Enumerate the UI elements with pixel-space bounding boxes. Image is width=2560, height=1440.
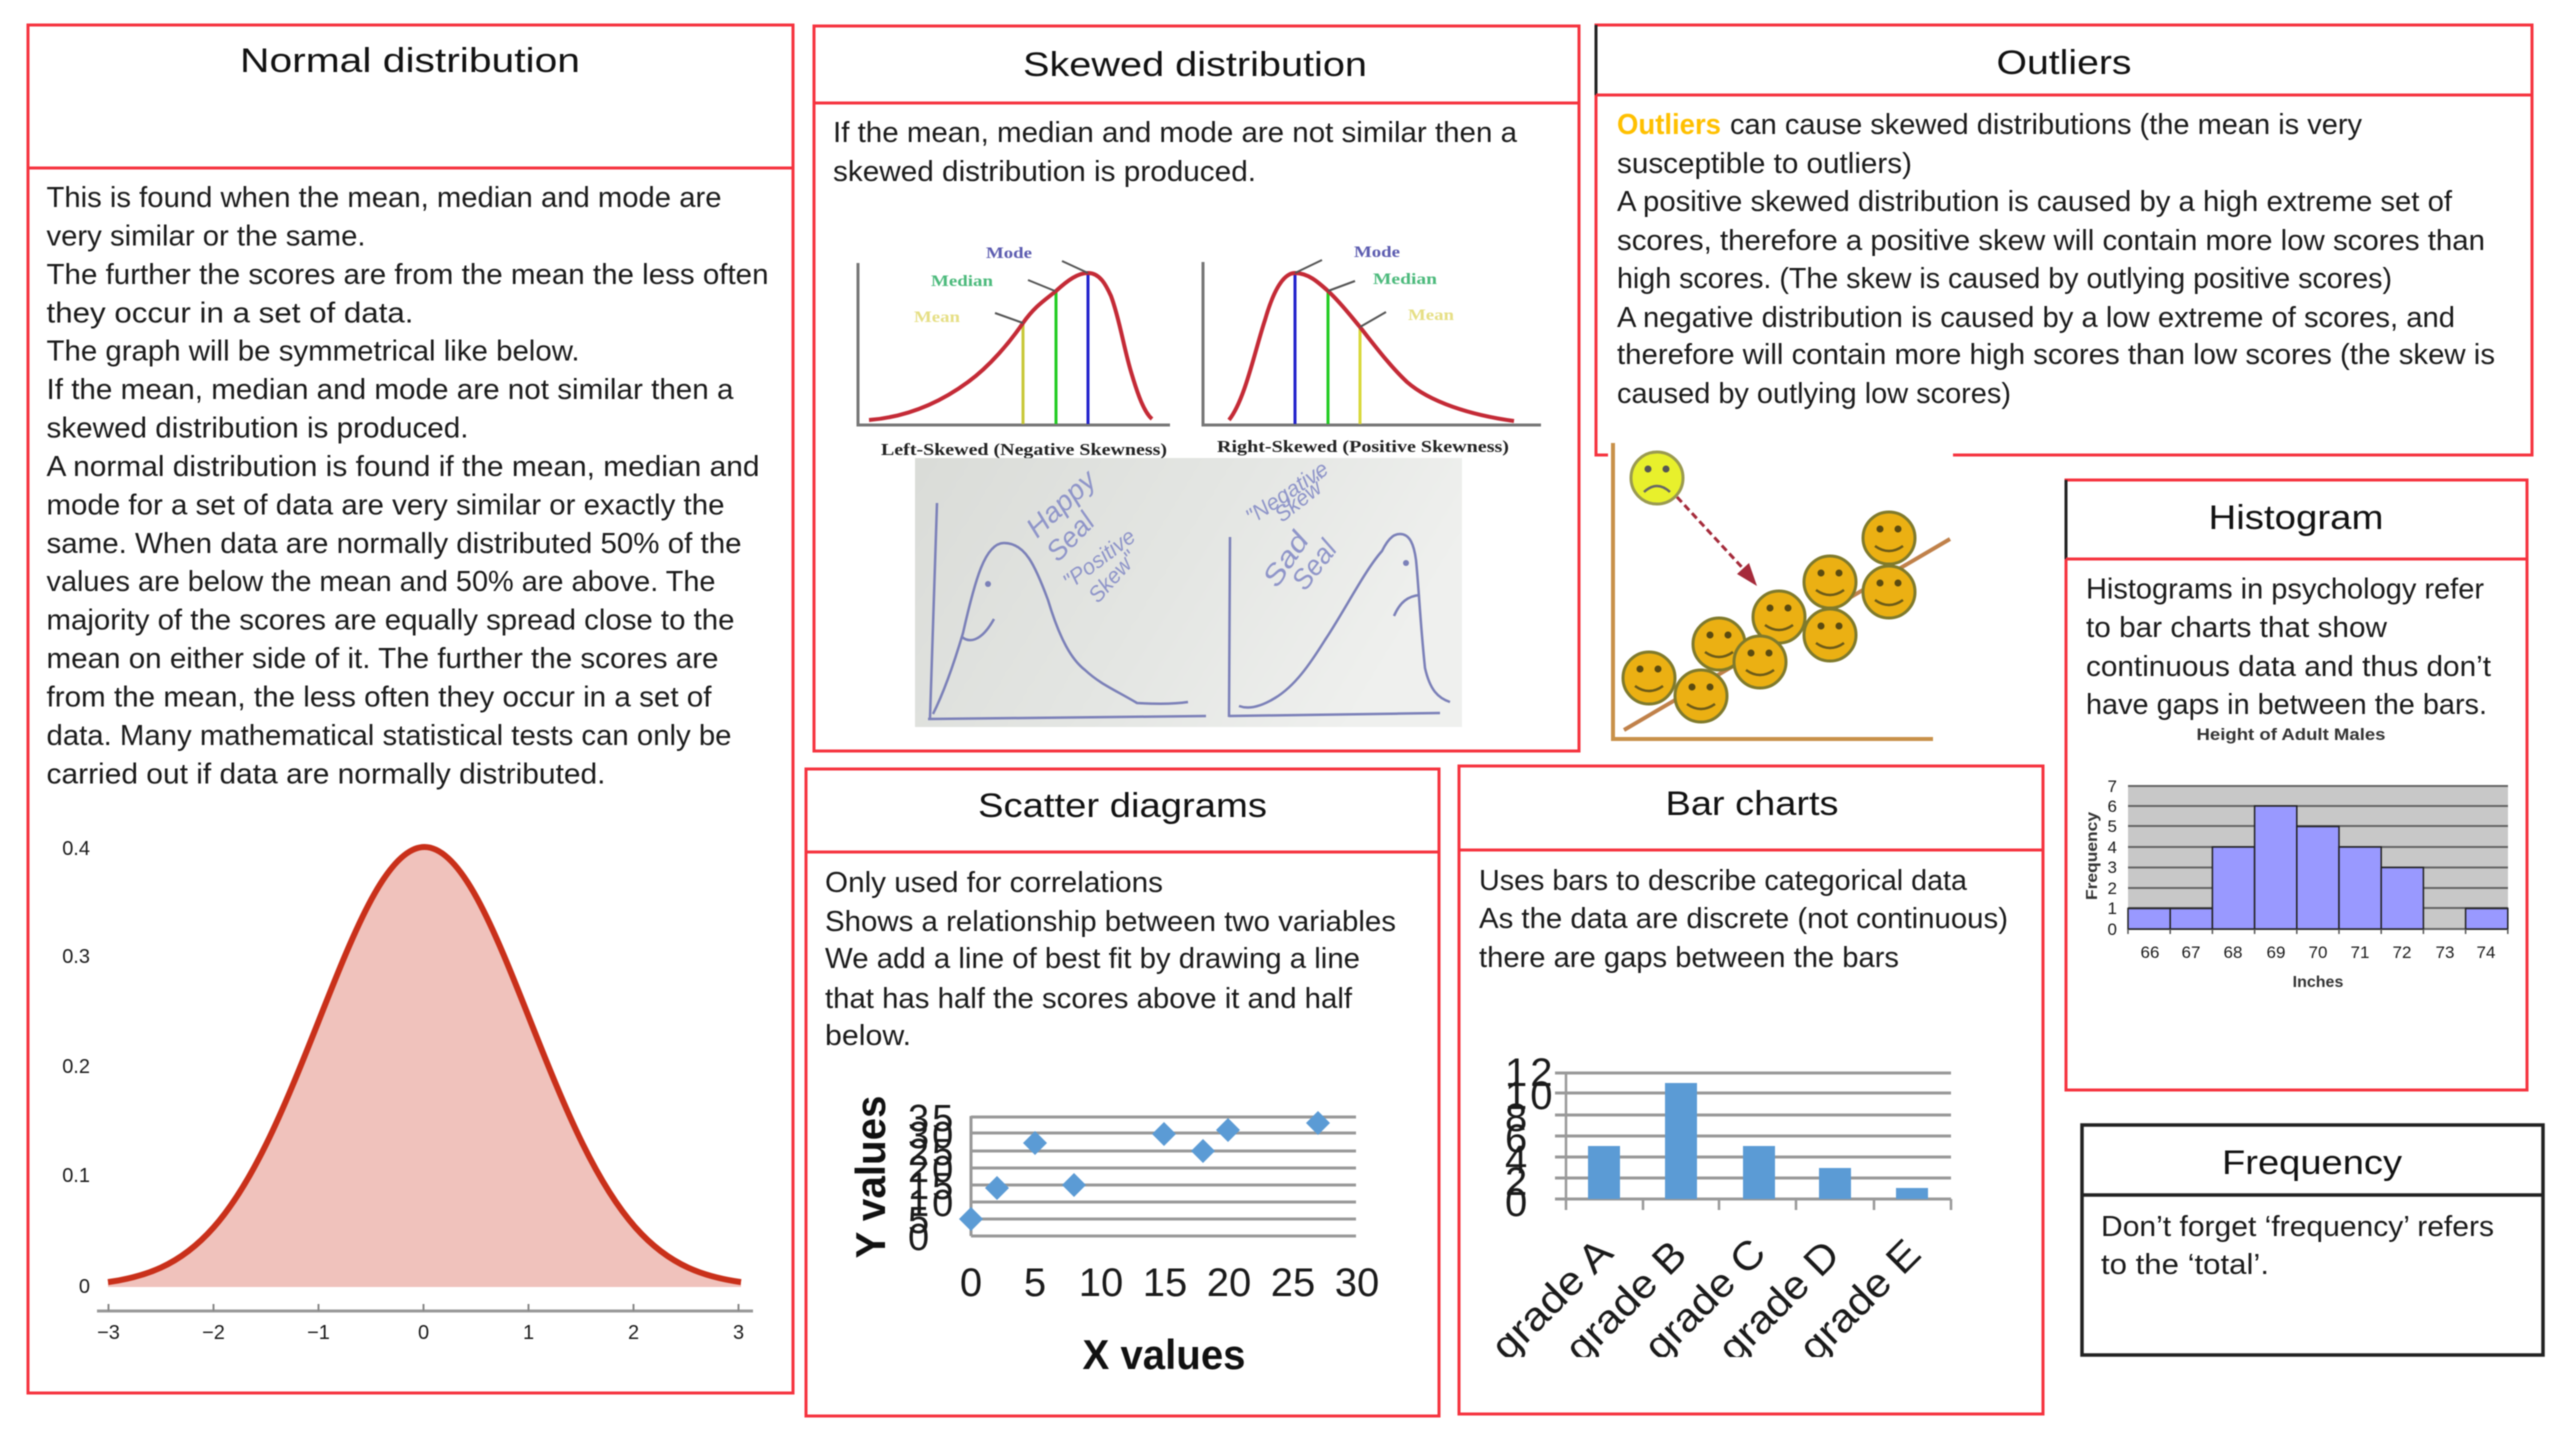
chart: bell curve: 0 bbox=[418, 1322, 429, 1344]
text block: histogram explanation: to bar charts that show bbox=[2086, 612, 2388, 644]
chart: height of adult males histogram: 72 bbox=[2393, 943, 2411, 962]
text block: normal distribution explanation: from the mean, the less often they occur in a set of bbox=[46, 682, 712, 714]
sketch: sad seal bbox=[1229, 456, 1450, 717]
chart: grade bar chart: grade C bbox=[1636, 1230, 1774, 1369]
text block: outliers explanation: therefore will contain more high scores than low scores (the skew is bbox=[1617, 339, 2495, 371]
panel: normal distribution bbox=[28, 25, 793, 1393]
chart: right-skewed curve bbox=[1203, 244, 1541, 456]
chart: scatter plot: Y values bbox=[847, 1096, 894, 1258]
chart: scatter plot: 25 bbox=[908, 1132, 956, 1174]
sketch: sad seal: Sad bbox=[1256, 525, 1316, 592]
chart: height of adult males histogram bbox=[2084, 725, 2508, 991]
text block: normal distribution explanation: very similar or the same. bbox=[46, 220, 366, 252]
chart: scatter plot: 20 bbox=[1207, 1261, 1251, 1305]
chart: height of adult males histogram: 2 bbox=[2108, 879, 2117, 898]
text block: normal distribution explanation: mode for a set of data are very similar or exactly the bbox=[46, 489, 724, 521]
chart: bell curve: 0.4 bbox=[62, 838, 90, 860]
chart: left-skewed curve: Median bbox=[931, 273, 993, 290]
text block: normal distribution explanation: mean on either side of it. The further the scores are bbox=[46, 643, 718, 675]
chart: grade bar chart: grade B bbox=[1557, 1232, 1695, 1371]
text block: outliers explanation: Outliers bbox=[1617, 109, 1721, 141]
text block: scatter diagrams explanation: that has half the scores above it and half bbox=[825, 983, 1353, 1015]
chart: grade bar chart: grade A bbox=[1483, 1230, 1622, 1369]
chart: grade bar chart bbox=[1483, 1051, 1951, 1371]
chart: bell curve: 0 bbox=[79, 1276, 90, 1298]
panel: histogram bbox=[2066, 480, 2527, 1090]
chart: grade bar chart: 8 bbox=[1505, 1096, 1530, 1140]
chart: bell curve: 0.3 bbox=[62, 946, 90, 968]
chart: scatter plot: 15 bbox=[908, 1166, 956, 1208]
chart: height of adult males histogram: 74 bbox=[2477, 943, 2495, 962]
text block: outliers explanation: scores, therefore a positive skew will contain more low scores than bbox=[1617, 225, 2485, 257]
chart: right-skewed curve: Mode bbox=[1354, 244, 1400, 261]
chart: height of adult males histogram: 67 bbox=[2182, 943, 2200, 962]
chart: grade bar chart: 12 bbox=[1505, 1051, 1556, 1095]
chart: height of adult males histogram: 73 bbox=[2436, 943, 2454, 962]
text block: frequency note: Don’t forget ‘frequency’ refers bbox=[2101, 1211, 2494, 1243]
text block: normal distribution explanation: carried out if data are normally distributed. bbox=[46, 758, 606, 790]
illustration: outlier smileys scatter bbox=[1608, 443, 1953, 745]
chart: bell curve: 3 bbox=[733, 1322, 744, 1344]
chart: bell curve: 0.1 bbox=[62, 1165, 90, 1187]
chart: height of adult males histogram: 68 bbox=[2224, 943, 2242, 962]
heading: frequency: Frequency bbox=[2222, 1144, 2402, 1182]
text block: outliers explanation: caused by outlying low scores) bbox=[1617, 378, 2011, 410]
chart: left-skewed curve: Mode bbox=[986, 245, 1032, 262]
chart: scatter plot: 30 bbox=[908, 1115, 956, 1157]
chart: scatter plot: 5 bbox=[908, 1200, 932, 1242]
chart: height of adult males histogram: 4 bbox=[2108, 838, 2117, 857]
chart: height of adult males histogram: 0 bbox=[2108, 920, 2117, 939]
chart: bell curve: −1 bbox=[307, 1322, 330, 1344]
text block: normal distribution explanation: If the mean, median and mode are not similar then a bbox=[46, 374, 734, 406]
heading: histogram: Histogram bbox=[2208, 499, 2384, 537]
text block: normal distribution explanation: data. Many mathematical statistical tests can only be bbox=[46, 720, 732, 752]
chart: left-skewed curve bbox=[858, 245, 1170, 459]
sketch: happy seal: Skew" bbox=[1083, 545, 1143, 607]
sketch: sad seal: Seal bbox=[1285, 533, 1343, 596]
panel: bar charts bbox=[1459, 766, 2043, 1414]
panel: frequency bbox=[2082, 1125, 2543, 1355]
chart: bell curve: 2 bbox=[628, 1322, 639, 1344]
chart: height of adult males histogram: 70 bbox=[2309, 943, 2327, 962]
chart: height of adult males histogram: 6 bbox=[2108, 797, 2117, 816]
text block: histogram explanation: Histograms in psychology refer bbox=[2086, 574, 2484, 606]
chart: bell curve: −2 bbox=[202, 1322, 225, 1344]
sketch: happy seal: Happy bbox=[1020, 463, 1103, 543]
chart: grade bar chart: 10 bbox=[1505, 1074, 1556, 1118]
heading: outliers: Outliers bbox=[1996, 44, 2132, 82]
chart: grade bar chart: 2 bbox=[1505, 1160, 1530, 1204]
chart: height of adult males histogram: 5 bbox=[2108, 817, 2117, 836]
text block: normal distribution explanation: skewed distribution is produced. bbox=[46, 412, 468, 444]
chart: scatter plot: 0 bbox=[960, 1261, 982, 1305]
chart: scatter plot: 30 bbox=[1335, 1261, 1379, 1305]
text block: normal distribution explanation bbox=[46, 182, 768, 790]
text block: bar charts explanation: As the data are discrete (not continuous) bbox=[1479, 903, 2008, 935]
text block: bar charts explanation bbox=[1479, 865, 2008, 974]
text block: normal distribution explanation: The graph will be symmetrical like below. bbox=[46, 336, 580, 368]
chart: height of adult males histogram: 3 bbox=[2108, 858, 2117, 877]
panel: scatter diagrams bbox=[806, 769, 1439, 1416]
text block: skewed distribution definition: If the mean, median and mode are not similar then a bbox=[833, 117, 1518, 149]
text block: normal distribution explanation: This is found when the mean, median and mode are bbox=[46, 182, 721, 214]
chart: bell curve: −3 bbox=[97, 1322, 120, 1344]
text block: outliers explanation: high scores. (The skew is caused by outlying positive scores) bbox=[1617, 263, 2392, 295]
chart: height of adult males histogram: Frequency bbox=[2084, 812, 2101, 900]
icons: happy faces cluster bbox=[1623, 512, 1915, 722]
text block: outliers explanation: A negative distribution is caused by a low extreme of scores, and bbox=[1617, 302, 2455, 334]
chart: right-skewed curve: Median bbox=[1373, 271, 1437, 288]
chart: scatter plot: 10 bbox=[908, 1183, 956, 1225]
chart: bell curve bbox=[62, 838, 753, 1344]
text block: normal distribution explanation: values are below the mean and 50% are above. The bbox=[46, 566, 716, 598]
text block: skewed distribution definition bbox=[833, 117, 1518, 188]
text block: scatter diagrams explanation: Shows a relationship between two variables bbox=[825, 906, 1396, 938]
chart: height of adult males histogram: 1 bbox=[2108, 899, 2117, 918]
chart: scatter plot: 5 bbox=[1024, 1261, 1046, 1305]
text block: histogram explanation: continuous data and thus don’t bbox=[2086, 651, 2491, 683]
text block: normal distribution explanation: The further the scores are from the mean the less often bbox=[46, 259, 768, 291]
panel: outliers bbox=[1596, 25, 2532, 455]
text block: normal distribution explanation: A normal distribution is found if the mean, median and bbox=[46, 451, 760, 483]
chart: height of adult males histogram: Inches bbox=[2293, 974, 2343, 991]
chart: scatter plot: 0 bbox=[908, 1217, 932, 1259]
chart: height of adult males histogram: 66 bbox=[2141, 943, 2159, 962]
chart: left-skewed curve: Mean bbox=[914, 309, 960, 326]
sketch: happy seal bbox=[928, 463, 1206, 719]
sketch: sad seal: "Negative bbox=[1241, 456, 1333, 529]
chart: scatter plot: 25 bbox=[1271, 1261, 1315, 1305]
text block: outliers explanation bbox=[1617, 109, 2495, 410]
chart: height of adult males histogram: Height of Adult Males bbox=[2196, 725, 2386, 744]
chart: scatter plot: 35 bbox=[908, 1098, 956, 1140]
chart: scatter plot: 20 bbox=[908, 1149, 956, 1191]
text block: normal distribution explanation: majority of the scores are equally spread close to the bbox=[46, 605, 734, 637]
chart: grade bar chart: 6 bbox=[1505, 1117, 1530, 1161]
arrow: outlier to cluster bbox=[1677, 497, 1757, 586]
chart: height of adult males histogram: 7 bbox=[2108, 777, 2117, 796]
text block: scatter diagrams explanation: We add a line of best fit by drawing a line bbox=[825, 943, 1360, 975]
text block: skewed distribution definition: skewed distribution is produced. bbox=[833, 156, 1256, 188]
sketch: happy seal: Seal bbox=[1040, 506, 1101, 567]
text block: scatter diagrams explanation bbox=[825, 867, 1396, 1052]
text block: bar charts explanation: Uses bars to describe categorical data bbox=[1479, 865, 1968, 897]
heading: skewed distribution: Skewed distribution bbox=[1023, 46, 1367, 84]
sketch: sad seal: Skew" bbox=[1270, 470, 1333, 527]
chart: grade bar chart: grade E bbox=[1791, 1231, 1929, 1370]
text block: frequency note bbox=[2101, 1211, 2494, 1281]
chart: scatter plot: 15 bbox=[1143, 1261, 1187, 1305]
chart: right-skewed curve: Right-Skewed (Positive Skewness) bbox=[1217, 437, 1509, 456]
heading: bar charts: Bar charts bbox=[1666, 785, 1838, 823]
chart: grade bar chart: 4 bbox=[1505, 1138, 1530, 1182]
text block: outliers explanation: can cause skewed distributions (the mean is very bbox=[1730, 109, 2362, 141]
text block: histogram explanation: have gaps in between the bars. bbox=[2086, 689, 2487, 721]
panel: skewed distribution bbox=[814, 26, 1579, 751]
text block: bar charts explanation: there are gaps between the bars bbox=[1479, 942, 1899, 974]
text block: scatter diagrams explanation: below. bbox=[825, 1020, 911, 1052]
sketch: happy seal: "Positive bbox=[1058, 523, 1140, 594]
heading: scatter diagrams: Scatter diagrams bbox=[978, 787, 1267, 825]
chart: scatter plot bbox=[847, 1096, 1379, 1378]
chart: bell curve: 1 bbox=[523, 1322, 534, 1344]
chart: scatter plot: 10 bbox=[1079, 1261, 1123, 1305]
chart: bell curve: 0.2 bbox=[62, 1056, 90, 1078]
text block: outliers explanation: susceptible to outliers) bbox=[1617, 148, 1912, 180]
chart: height of adult males histogram: 71 bbox=[2351, 943, 2369, 962]
text block: histogram explanation bbox=[2086, 574, 2491, 721]
chart: grade bar chart: grade D bbox=[1710, 1232, 1848, 1371]
chart: height of adult males histogram: 69 bbox=[2267, 943, 2285, 962]
chart: left-skewed curve: Left-Skewed (Negative Skewness) bbox=[881, 440, 1167, 459]
chart: right-skewed curve: Mean bbox=[1408, 307, 1454, 324]
icon: sad outlier face bbox=[1631, 452, 1683, 504]
text block: scatter diagrams explanation: Only used for correlations bbox=[825, 867, 1163, 899]
text block: normal distribution explanation: they occur in a set of data. bbox=[46, 297, 414, 329]
text block: frequency note: to the ‘total’. bbox=[2101, 1249, 2269, 1281]
chart: scatter plot: X values bbox=[1082, 1331, 1246, 1378]
text block: normal distribution explanation: same. When data are normally distributed 50% of the bbox=[46, 528, 742, 560]
sketch photo: happy seal and sad seal bbox=[915, 456, 1462, 727]
chart: grade bar chart: 0 bbox=[1505, 1181, 1530, 1225]
heading: normal distribution: Normal distribution bbox=[240, 42, 580, 80]
text block: outliers explanation: A positive skewed distribution is caused by a high extreme set of bbox=[1617, 186, 2453, 218]
